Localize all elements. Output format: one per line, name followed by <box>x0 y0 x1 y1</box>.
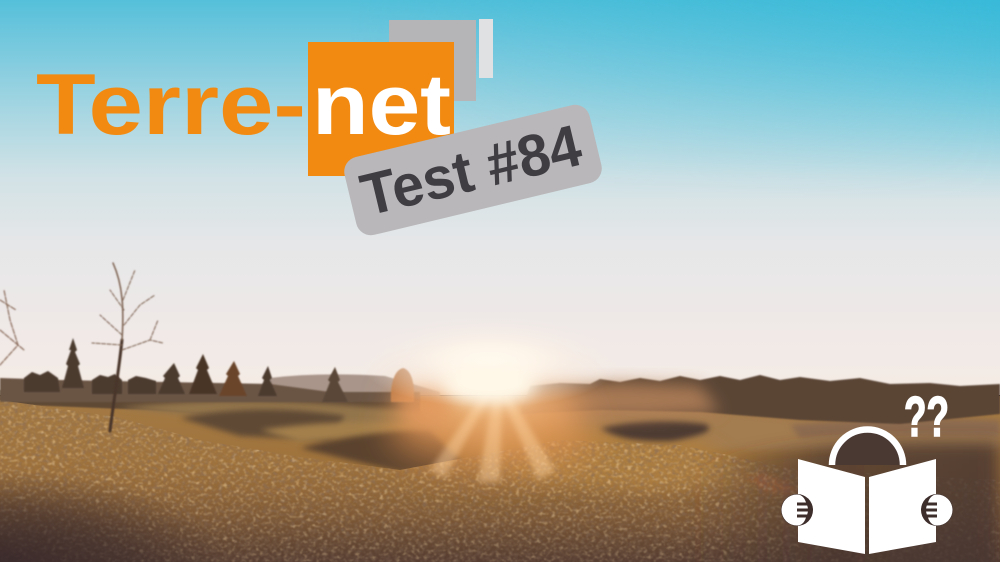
ground: main golden grass <box>0 400 469 475</box>
icon: right book page <box>869 459 936 554</box>
ground: shaded bottom-left corner <box>0 475 202 562</box>
trees: left conifer group <box>24 338 414 402</box>
ground: shaded lower edge <box>86 507 1000 562</box>
logo: light grey bar <box>479 19 493 78</box>
ground: tan ridge right of the sun <box>596 414 999 450</box>
ground: rolling meadow <box>0 390 1000 562</box>
logo: orange square <box>308 42 454 176</box>
icon: left book page <box>798 459 865 554</box>
icon: person reading a book with question marks <box>781 385 953 554</box>
tree: bare sapling <box>92 263 163 431</box>
background: distant tree line and hills <box>0 374 1000 424</box>
sun glow and rays <box>360 316 620 490</box>
logo: grey square <box>389 20 476 101</box>
texture: grass grain <box>0 398 1000 562</box>
background: sky gradient <box>0 0 1000 395</box>
logo: Terre-net <box>36 19 493 176</box>
icon: right hand <box>921 494 953 526</box>
tree: bare branches at left edge <box>0 290 24 365</box>
icon: left hand <box>781 494 813 526</box>
badge text: Test #84 <box>354 112 588 229</box>
icon: head arc <box>832 429 903 465</box>
badge: Test #84 <box>341 102 605 238</box>
ground: dark hollow <box>600 421 709 441</box>
icon: question marks: ?? <box>904 385 949 449</box>
logo: word net: net <box>312 57 451 153</box>
logo: word Terre-: Terre- <box>36 57 306 153</box>
ground: dark mounds behind left meadow <box>0 390 419 412</box>
ground: shaded right side <box>690 442 1000 562</box>
